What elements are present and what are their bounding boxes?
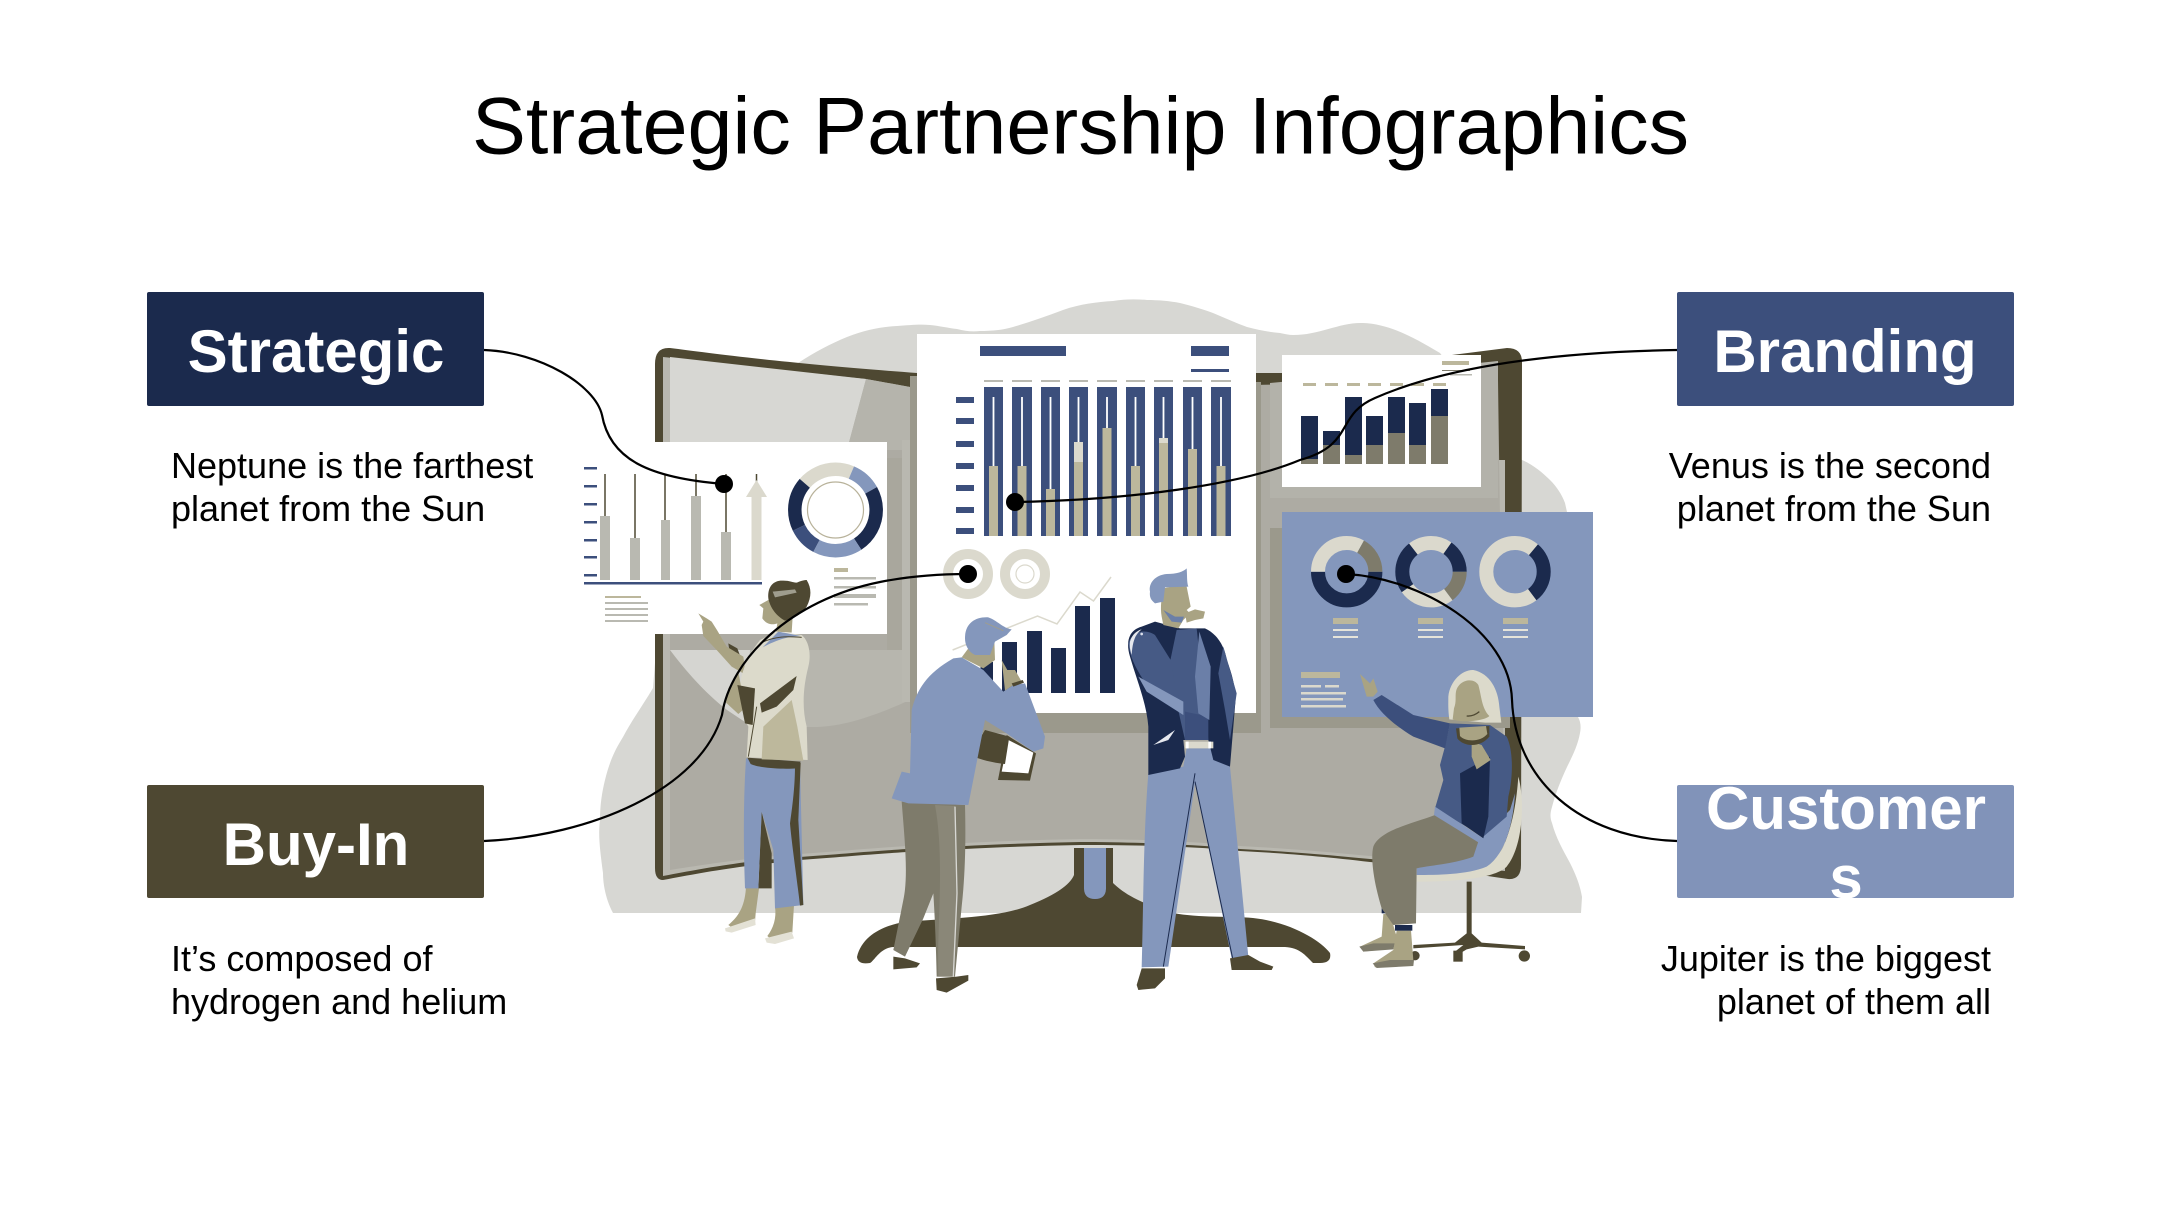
woman lower arm — [726, 672, 747, 714]
middle panel white centre lines — [994, 397, 1221, 489]
man cap — [965, 617, 1012, 655]
chair seat — [1417, 777, 1522, 882]
left panel donut chart — [795, 469, 876, 551]
top right panel dashes — [1303, 383, 1446, 386]
panel: left chart — [560, 442, 887, 634]
person: standing woman pointing — [698, 580, 810, 944]
title: Strategic Partnership Infographics — [472, 82, 1689, 172]
middle panel axis ticks — [956, 397, 974, 534]
middle panel ring charts — [948, 554, 1045, 594]
left panel legend right — [834, 568, 876, 606]
label: Buy-In — [147, 785, 484, 898]
woman head and hair — [759, 580, 810, 633]
connector: Customers — [1346, 574, 1677, 841]
man shoes — [893, 957, 968, 993]
seated woman raised arm — [1360, 674, 1450, 748]
connector: Strategic — [484, 350, 724, 484]
middle panel dark bars — [980, 598, 1115, 693]
stacked bars grey — [1301, 416, 1448, 464]
connector: Branding — [1015, 350, 1677, 502]
man jacket — [892, 657, 1045, 805]
donut chart three — [1486, 543, 1544, 600]
label: Strategic — [147, 292, 484, 406]
left chart bars — [600, 496, 731, 580]
person: bearded man with crossed arm — [1128, 568, 1273, 990]
bearded man belt — [1185, 742, 1213, 748]
connector: Buy-In — [484, 574, 968, 841]
monitor frame and screen — [655, 348, 1522, 880]
blue panel note lines — [1301, 672, 1346, 708]
panel: top right chart — [1282, 355, 1481, 487]
label: Strategic: Strategic — [188, 318, 444, 385]
seated woman face and scarf — [1453, 680, 1489, 745]
shadow behind blue panel — [1270, 528, 1510, 728]
strip beside left panel — [902, 440, 910, 702]
label: Customers — [1677, 775, 2014, 911]
woman raised arm — [698, 613, 746, 675]
bearded man shoes — [1137, 955, 1273, 990]
left chart axis ticks — [584, 467, 762, 584]
text: Strategic description: Neptune is the farthest — [171, 445, 533, 486]
man clipboard — [970, 730, 1036, 781]
woman jacket — [740, 632, 810, 761]
bearded man vest — [1128, 622, 1235, 775]
middle panel header — [980, 346, 1229, 372]
man neck and face — [962, 640, 995, 668]
text: Branding description: Venus is the second — [1669, 445, 1991, 486]
seated woman hand on chest — [1472, 742, 1491, 769]
screen reflection: lighter wedge — [670, 650, 750, 722]
text: Strategic description: planet from the Sun — [171, 488, 485, 529]
label: Buy-In: Buy-In — [223, 811, 409, 878]
label: Branding — [1677, 292, 2014, 406]
text: Buy-In description: hydrogen and helium — [171, 981, 507, 1022]
shadow behind left panel — [887, 458, 902, 650]
stacked bars dark — [1301, 389, 1448, 459]
text: Customers description: Jupiter is the biggest — [1661, 938, 1991, 979]
background blob — [599, 299, 1582, 913]
person: seated woman on office chair — [1359, 670, 1530, 968]
screen reflection: lower left — [670, 650, 910, 727]
man trousers — [893, 802, 965, 977]
left panel legend left — [605, 596, 648, 622]
office chair base — [1410, 882, 1530, 962]
bearded man shirt — [1168, 628, 1208, 740]
middle panel trend line — [953, 577, 1111, 650]
label: Branding: Branding — [1713, 318, 1977, 385]
donut labels — [1333, 618, 1528, 638]
bearded man sleeves — [1128, 629, 1237, 745]
panel: blue donut dashboard — [1282, 512, 1593, 717]
middle panel dashes — [984, 380, 1231, 382]
label: Customers: s — [1829, 844, 1863, 911]
screen reflection: top middle — [847, 379, 910, 450]
donut chart two — [1402, 543, 1460, 600]
bearded man trousers — [1142, 748, 1248, 967]
man hand and watch — [1002, 660, 1024, 691]
bearded man head — [1150, 568, 1205, 628]
screen reflection: top left — [670, 357, 866, 450]
shadow behind middle panel — [910, 376, 1261, 733]
woman legs and shoes — [725, 887, 794, 944]
panel: middle chart — [917, 334, 1256, 713]
seated woman legs and shoes — [1359, 908, 1414, 968]
middle panel beige bars — [989, 428, 1226, 536]
shadow behind top right panel — [1270, 362, 1498, 498]
up arrow — [746, 480, 767, 580]
text: Buy-In description: It’s composed of — [171, 938, 433, 979]
label: Customers: Customer — [1706, 775, 1986, 842]
woman folder top — [728, 643, 742, 667]
connector dots — [715, 475, 1355, 583]
left chart whiskers — [605, 474, 756, 538]
woman trousers — [744, 758, 803, 908]
seated woman hair — [1448, 670, 1501, 723]
monitor stand — [857, 848, 1330, 963]
seated woman torso — [1434, 723, 1512, 843]
seated woman trousers — [1372, 815, 1478, 925]
text: Customers description: planet of them all — [1717, 981, 1991, 1022]
illustration: team reviewing dashboards — [484, 299, 1677, 993]
person: man with cap and clipboard — [892, 617, 1045, 993]
top right panel header — [1442, 361, 1472, 376]
donut chart one — [1318, 543, 1375, 600]
middle panel blue bars — [984, 387, 1231, 536]
text: Branding description: planet from the Sun — [1677, 488, 1991, 529]
woman folder — [737, 685, 755, 725]
